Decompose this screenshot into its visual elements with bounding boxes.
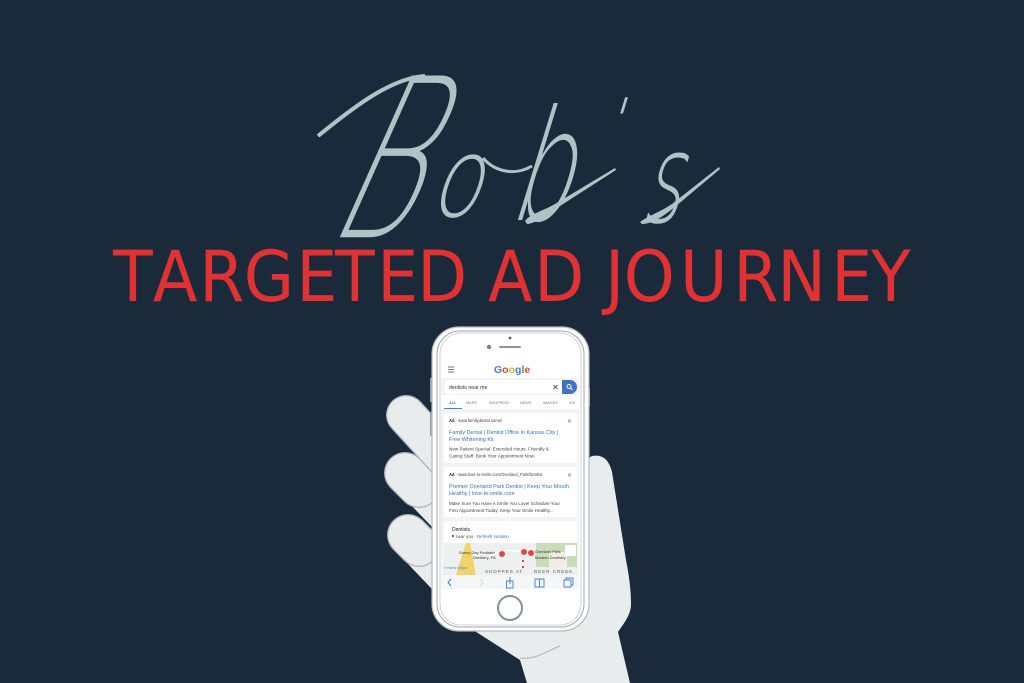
clear icon	[554, 385, 558, 389]
camera	[509, 337, 511, 339]
ad card 1: Family Dental | Dentist Office in Kansas City |	[449, 430, 558, 436]
tabs: VID	[569, 401, 576, 405]
script heading: Bob's: o	[419, 114, 512, 242]
hand: palm and wrist	[470, 456, 631, 683]
script heading: Bob's	[299, 31, 720, 292]
script heading: Bob's: b	[496, 78, 611, 257]
ad card 1: Free Whitening Kit	[449, 437, 494, 443]
title: targeted ad journey: TARGETED AD JOURNEY	[112, 236, 912, 318]
google logo: Google	[494, 364, 530, 376]
menu icon	[448, 367, 454, 372]
tabs: IMAGES	[543, 401, 558, 405]
front sensor	[487, 345, 491, 349]
tabs: MAPS	[466, 401, 477, 405]
hand: second finger fill	[405, 473, 419, 487]
map: Dentistry, PA	[473, 555, 496, 560]
expand icon	[565, 545, 576, 556]
map: e Home Depot	[444, 566, 467, 570]
script heading: Bob's: B	[299, 31, 500, 292]
ad card 2	[444, 467, 577, 517]
tabs: ALL	[449, 401, 457, 405]
ad card 2: Healthy | love-to-smile.com	[449, 491, 515, 497]
script heading: Bob's: s	[632, 107, 709, 252]
hand: first finger	[406, 415, 460, 474]
tabs	[441, 395, 579, 409]
local results card	[444, 521, 577, 589]
script heading: Bob's: '	[601, 86, 638, 156]
ad card 1: Caring Staff. Book Your Appointment Now.	[449, 454, 535, 458]
speaker	[499, 346, 521, 348]
map: DEER CREEK	[534, 569, 573, 574]
local results card: Dentists	[452, 527, 471, 533]
hand: second finger	[405, 473, 419, 487]
ad card 2: Premier Overland Park Dentist | Keep Your Mouth	[449, 484, 569, 490]
hand: third finger base	[408, 535, 470, 600]
hand: third finger fill	[408, 535, 419, 546]
map: SHOPPES AT	[485, 569, 523, 574]
tabs: NEWS	[520, 401, 532, 405]
hand: third finger	[408, 535, 419, 546]
ad card 1: Ad · www.familydental.some/	[449, 418, 503, 423]
tabs: SHOPPING	[489, 401, 509, 405]
inner bezel	[437, 331, 584, 627]
inner bezel line	[440, 333, 581, 625]
side buttons	[431, 378, 589, 436]
search glyph	[567, 384, 572, 390]
map: Modern Dentistry	[535, 555, 565, 560]
ad card 2: Make Sure You Have A Smile You Love! Schedule Your	[449, 501, 560, 506]
outer shell	[432, 327, 589, 631]
map	[444, 543, 577, 575]
local results card: near you · Refresh location	[456, 534, 509, 539]
ad card 2: Ad · www.love-to-smile.com/Overland_Park/Dentist	[449, 472, 543, 477]
search box	[444, 380, 577, 394]
browser toolbar	[441, 575, 579, 589]
google header	[441, 360, 579, 378]
map: Overland Park	[535, 549, 561, 554]
hand: second finger base	[405, 473, 460, 530]
map: Sunny Day Pediatric	[459, 550, 495, 555]
hand: palm crease	[520, 646, 560, 658]
home button	[498, 596, 522, 620]
illustration: hand holding phone	[405, 327, 631, 683]
hand: first finger fill	[406, 415, 460, 474]
ad card 1	[444, 413, 577, 463]
ad card 2: First Appointment Today. Keep Your Smile Healthy...	[449, 508, 554, 513]
search button	[562, 380, 577, 394]
map pins	[499, 549, 534, 568]
phone screen	[441, 360, 579, 589]
ad card 1: New Patient Special. Extended Hours. Friendly &	[449, 446, 549, 452]
phone body	[431, 327, 589, 631]
search box: dentists near me	[449, 385, 487, 391]
